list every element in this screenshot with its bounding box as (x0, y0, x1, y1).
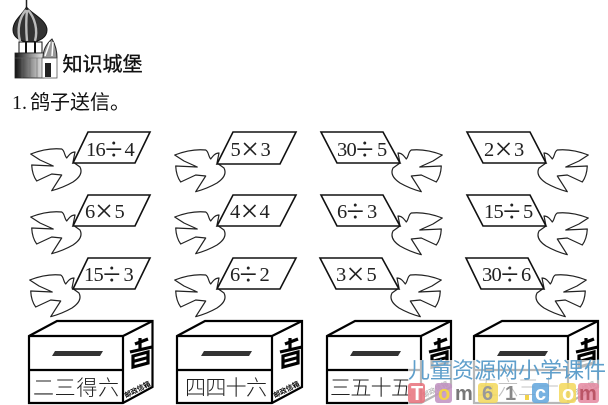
watermark: 儿童资源网小学课件 (408, 358, 606, 383)
mailbox: 四四十六: 四四十六 (185, 377, 267, 400)
watermark: m (455, 383, 473, 405)
pigeon: 16÷4: 16 (86, 139, 106, 161)
watermark: m (579, 383, 597, 405)
watermark: T (411, 383, 423, 405)
pigeon: 30÷6: ÷ (501, 256, 519, 292)
pigeon: 16÷4: ÷ (105, 130, 123, 166)
mailbox: 五六三十 (474, 321, 598, 403)
watermark: 1 (505, 383, 516, 405)
pigeon: 6÷2 (175, 256, 296, 317)
pigeon: 6×5: 5 (114, 201, 125, 223)
pigeon: 30÷5 (321, 130, 442, 192)
pigeon: 16÷4: 4 (124, 139, 135, 161)
watermark: c (535, 383, 546, 405)
mailbox: 二三得六: 二三得六 (33, 377, 119, 400)
mailbox: 三五十五: 邮政信箱 (421, 379, 450, 400)
pigeon: 6÷3 (321, 192, 442, 255)
pigeon: 3×5 (320, 256, 441, 317)
pigeon: 5×3 (175, 130, 296, 192)
mailbox: 四四十六: 邮政信箱 (272, 379, 301, 400)
pigeon: 6÷3: ÷ (346, 192, 364, 228)
pigeon: 6÷2: 2 (260, 264, 270, 286)
pigeon: 2×3: 3 (514, 139, 524, 161)
mailbox: 三五十五 (327, 321, 451, 403)
pigeon: 5×3: 3 (260, 139, 271, 161)
watermark: o (562, 383, 574, 405)
pigeon: 30÷6 (466, 256, 586, 317)
pigeon: 6÷3: 6 (337, 201, 347, 223)
pigeon: 6×5: 6 (85, 201, 95, 223)
mailbox: 二三得六: 邮政信箱 (123, 379, 152, 400)
pigeon: 30÷6: 30 (482, 264, 502, 286)
pigeon: 4×4 (175, 192, 296, 254)
pigeon: 15÷3: 3 (124, 264, 134, 286)
question text: 鸽子送信。 (30, 91, 130, 114)
pigeon: 15÷3: ÷ (103, 256, 121, 292)
question text: 1. (12, 92, 27, 114)
pigeon: 5×3: × (241, 130, 259, 166)
pigeon: 15÷5 (467, 192, 588, 255)
pigeon: 30÷5: ÷ (356, 130, 374, 166)
pigeon: 2×3: × (494, 130, 513, 166)
pigeon: 3×5: 5 (366, 264, 377, 286)
pigeon: 6×5 (31, 192, 150, 254)
pigeon: 16÷4 (31, 130, 150, 191)
pigeon: 30÷5: 5 (377, 139, 387, 161)
icon: onion dome castle (13, 0, 57, 78)
pigeon: 6÷3: 3 (367, 201, 377, 223)
pigeon: 4×4: × (240, 192, 259, 228)
watermark: 6 (482, 383, 493, 405)
pigeon: 3×5: × (346, 256, 365, 292)
pigeon: 30÷6: 6 (521, 264, 531, 286)
pigeon: 2×3 (467, 130, 588, 192)
watermark (408, 358, 608, 405)
pigeon: 6÷2: 6 (230, 264, 240, 286)
pigeon: 15÷3: 15 (84, 264, 104, 286)
pigeon: 4×4: 4 (230, 201, 240, 223)
mailbox: 二三得六 (29, 321, 152, 403)
mailbox: 五六三十: 五六三十 (477, 377, 559, 400)
pigeon: 15÷5: ÷ (503, 192, 521, 228)
mailbox: 五六三十: 邮政信箱 (568, 379, 597, 400)
pigeon: 5×3: 5 (230, 139, 241, 161)
pigeon: 15÷3 (30, 256, 150, 317)
watermark: o (438, 383, 450, 405)
pigeon: 6×5: × (95, 192, 113, 228)
mailbox: 四四十六 (177, 321, 302, 403)
pigeon: 15÷5: 5 (523, 201, 533, 223)
pigeon: 15÷5: 15 (484, 201, 504, 223)
pigeon: 30÷5: 30 (337, 139, 357, 161)
mailbox: 三五十五: 三五十五 (330, 377, 412, 400)
pigeon: 2×3: 2 (484, 139, 494, 161)
pigeon: 4×4: 4 (260, 201, 270, 223)
heading: 知识城堡: 知识城堡 (62, 53, 142, 76)
pigeon: 6÷2: ÷ (240, 256, 257, 292)
pigeon: 3×5: 3 (336, 264, 346, 286)
